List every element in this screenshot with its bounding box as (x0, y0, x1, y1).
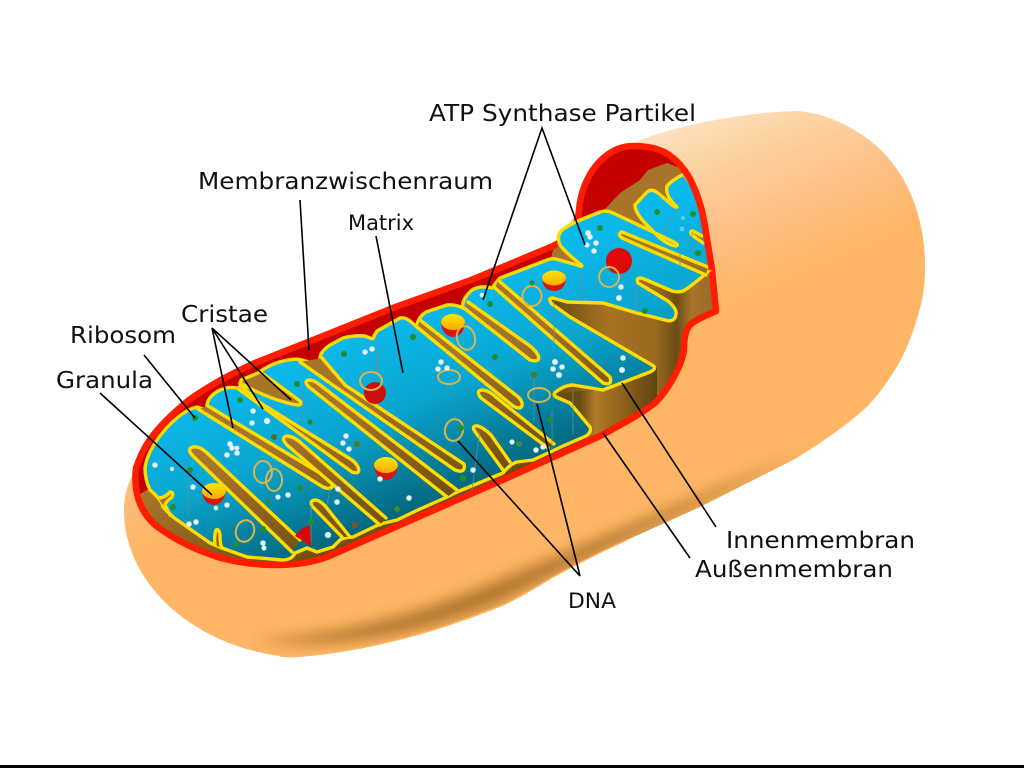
crista 1 (198, 406, 332, 488)
crista 14 (215, 530, 222, 548)
green particles (170, 209, 701, 547)
ribosome 1 (202, 483, 226, 505)
crista 13 (190, 447, 300, 552)
leader: Außenmembran (603, 433, 690, 558)
wall: lower notch (560, 367, 657, 438)
crista 6 (417, 320, 522, 408)
wall: upper notch (552, 276, 712, 396)
leader: Granula (100, 393, 212, 495)
cristae (158, 231, 708, 552)
label: Cristae: Cristae (181, 300, 268, 328)
label: Außenmembran: Außenmembran (695, 555, 893, 583)
crista 8 (495, 280, 611, 384)
label: ATP Synthase Partikel: ATP Synthase Partikel (429, 99, 696, 127)
crista 4 (300, 358, 464, 471)
label: Ribosom: Ribosom (70, 321, 176, 349)
leader: Matrix (376, 236, 403, 373)
granule: bottom wedge (295, 526, 311, 546)
white granule clusters (153, 216, 685, 550)
ribosome 2 (374, 457, 398, 480)
leader: Membranzwischenraum (300, 200, 309, 350)
bottom border bar (0, 765, 1024, 768)
crista 10 (478, 390, 554, 448)
DNA rings (233, 267, 619, 544)
outer membrane red outline (135, 146, 716, 565)
leader: Cristae (212, 328, 291, 428)
brown interior (140, 163, 682, 562)
label: Innenmembran: Innenmembran (726, 526, 915, 554)
crista 16 (620, 232, 708, 275)
crista 12 (311, 500, 350, 537)
crista 2 (240, 373, 301, 405)
leader: Innenmembran (622, 383, 716, 527)
red outline overlay on matrix edge (673, 158, 712, 270)
label: Membranzwischenraum: Membranzwischenraum (198, 167, 493, 195)
leader: ATP Synthase (483, 128, 585, 300)
granule: red sphere right (606, 248, 632, 274)
leader: Ribosom (144, 355, 195, 418)
granule: half hidden (364, 382, 386, 404)
crista 11 (284, 436, 386, 525)
label: Matrix: Matrix (348, 211, 414, 235)
ribosome 3 (441, 314, 465, 337)
crista 17 (691, 231, 703, 243)
leader lines (100, 128, 716, 576)
leader: DNA (458, 404, 580, 576)
label: DNA: DNA (568, 589, 617, 613)
ribosomes and granules (202, 248, 632, 546)
DNA strands and filaments (188, 208, 692, 545)
intermembrane space (135, 146, 716, 565)
cut section interior (130, 146, 730, 580)
crista 9 (473, 426, 510, 470)
crista 5 (306, 380, 457, 497)
labels (56, 99, 915, 613)
matrix (145, 174, 712, 560)
label: Granula: Granula (56, 366, 153, 394)
outer membrane body (124, 111, 925, 656)
crista 7 (464, 302, 539, 361)
crista 15 (158, 492, 173, 515)
ribosome 4 (542, 270, 566, 291)
crista 3 (237, 388, 359, 473)
